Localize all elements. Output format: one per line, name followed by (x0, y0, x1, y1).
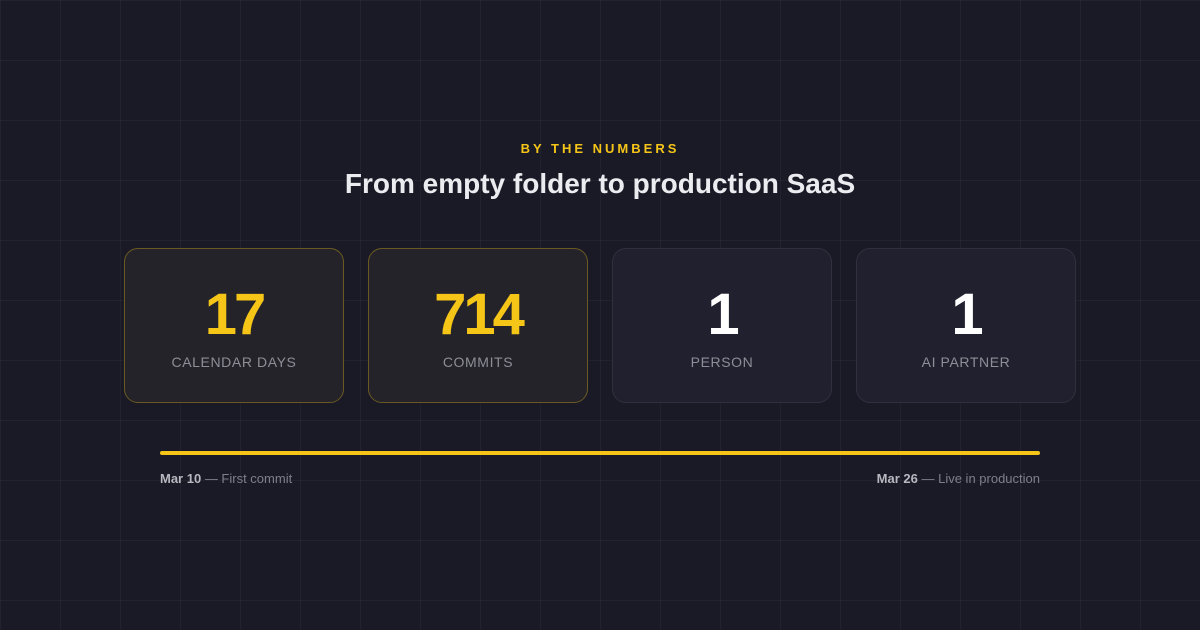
card: commits: 714 (434, 282, 522, 347)
card: commits: COMMITS (443, 354, 513, 370)
card: commits (368, 248, 588, 403)
timeline bar (160, 451, 1040, 455)
card: ai partner (856, 248, 1076, 403)
card: ai partner: AI PARTNER (922, 354, 1010, 370)
eyebrow: BY THE NUMBERS (521, 141, 679, 156)
card: calendar days: 17 (205, 282, 263, 347)
card: calendar days (124, 248, 344, 403)
card: person (612, 248, 832, 403)
start date: Mar 10 — First commit (160, 471, 292, 486)
card: calendar days: CALENDAR DAYS (171, 354, 297, 370)
card: ai partner: 1 (951, 282, 981, 347)
card: person: 1 (707, 282, 737, 347)
end date: Mar 26 — Live in production (877, 471, 1040, 486)
title: From empty folder to production SaaS (345, 168, 855, 199)
card: person: PERSON (691, 354, 753, 370)
